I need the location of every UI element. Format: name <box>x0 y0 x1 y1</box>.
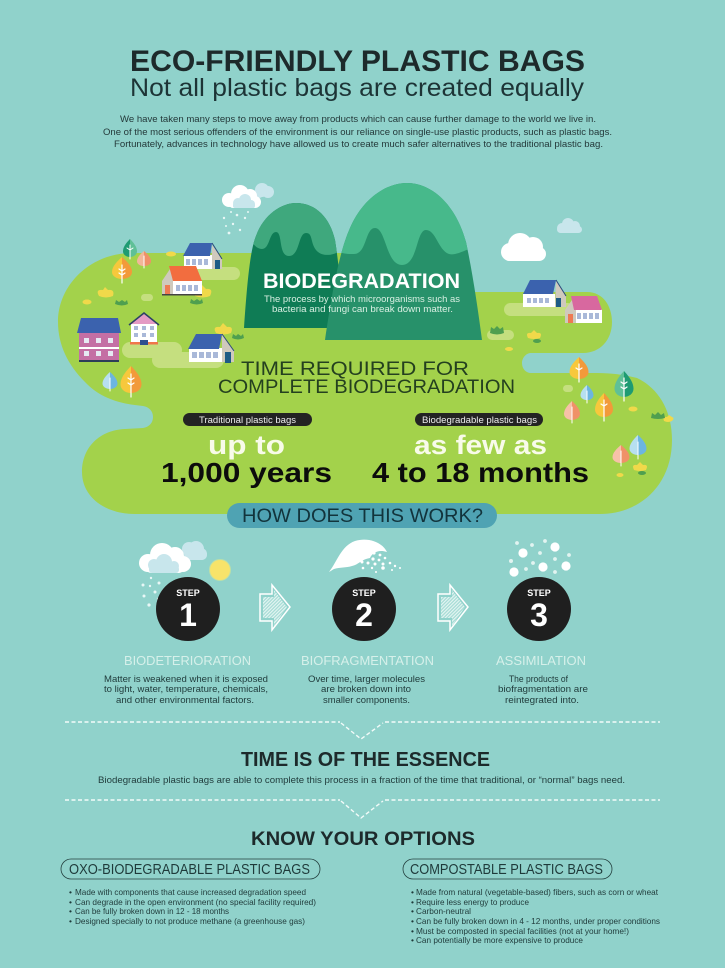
step 2 text <box>301 654 434 705</box>
step 3 text: reintegrated into. <box>505 694 579 705</box>
stat: up to 1,000 years: 1,000 years <box>161 457 332 488</box>
arrow 2 <box>438 585 468 630</box>
step 1 text: and other environmental factors. <box>116 694 254 705</box>
panel: compostable: • <box>411 926 414 936</box>
panel: oxo-biodegradable: • <box>69 897 72 907</box>
step 2 text: smaller components. <box>323 694 410 705</box>
stat: as few as 4 to 18 months: 4 to 18 months <box>372 457 589 488</box>
pill: biodegradable plastic bags: Biodegradable plastic bags <box>422 415 537 425</box>
panel: compostable: • <box>411 897 414 907</box>
pill: traditional plastic bags <box>183 413 312 426</box>
panel: compostable: Must be composted in special facilities (not at your home!) <box>416 926 629 936</box>
heading: time required: TIME REQUIRED FOR <box>241 359 469 380</box>
intro text block <box>103 114 612 149</box>
panel: oxo-biodegradable <box>61 859 320 926</box>
green land shape <box>58 253 672 514</box>
panel: oxo-biodegradable: Made with components that cause increased degradation speed <box>75 887 306 897</box>
step 3 text: biofragmentation are <box>498 683 588 694</box>
subtitle: Not all plastic bags are created equally <box>130 74 585 102</box>
house: blue roof lower <box>188 334 234 363</box>
biodegradation description: The process by which microorganisms such as <box>264 294 460 304</box>
panel: oxo-biodegradable: OXO-BIODEGRADABLE PLASTIC BAGS <box>69 862 310 878</box>
circle: step 1 <box>156 577 220 641</box>
panel: compostable: • <box>411 935 414 945</box>
intro text block: Fortunately, advances in technology have allowed us to create much safer alternatives to the traditional plastic bag. <box>114 139 603 149</box>
step 3 text <box>496 654 588 705</box>
step 3 text: ASSIMILATION <box>496 654 586 668</box>
step 2 text: Over time, larger molecules <box>308 673 425 684</box>
circle: step 3: STEP <box>527 588 551 598</box>
panel: oxo-biodegradable: • <box>69 906 72 916</box>
pale ground patches <box>122 267 574 392</box>
step 1 text <box>104 654 268 705</box>
heading pill: how does this work: HOW DOES THIS WORK? <box>242 505 483 527</box>
step 1 text: Matter is weakened when it is exposed <box>104 673 268 684</box>
stat: up to 1,000 years: up to <box>208 430 285 460</box>
stat: as few as 4 to 18 months <box>372 430 589 488</box>
back mountain <box>244 203 338 328</box>
house: orange roof <box>162 266 202 296</box>
panel: compostable: • <box>411 887 414 897</box>
panel: landscape <box>58 180 674 514</box>
heading: time required: COMPLETE BIODEGRADATION <box>218 377 515 398</box>
step 2 text: BIOFRAGMENTATION <box>301 654 434 668</box>
intro text block: One of the most serious offenders of the environment is our reliance on single-use plastic products, such as plastic bags. <box>103 127 612 137</box>
circle: step 3: 3 <box>530 597 548 633</box>
biodegradation description <box>264 294 460 314</box>
time text: Biodegradable plastic bags are able to complete this process in a fraction of the time that traditional, or “normal” bags need. <box>98 775 625 786</box>
panel: compostable <box>403 859 660 945</box>
shrubs and flowers <box>82 252 674 477</box>
house: right pink roof <box>565 296 602 323</box>
icon: feather (step 2) <box>329 540 401 573</box>
heading: biodegradation: BIODEGRADATION <box>263 270 460 293</box>
circle: step 1: STEP <box>176 588 200 598</box>
icon: weather (step 1) <box>139 541 230 607</box>
circle: step 2: STEP <box>352 588 376 598</box>
panel: oxo-biodegradable: Can be fully broken down in 12 - 18 months <box>75 906 229 916</box>
circle: step 1: 1 <box>179 597 197 633</box>
panel: compostable: COMPOSTABLE PLASTIC BAGS <box>410 862 603 878</box>
step 2 text: are broken down into <box>321 683 411 694</box>
panel: compostable: • <box>411 916 414 926</box>
circle: step 2 <box>332 577 396 641</box>
panel: compostable: • <box>411 906 414 916</box>
panel: oxo-biodegradable: Designed specially to not produce methane (a greenhouse gas) <box>75 916 305 926</box>
panel: compostable: Require less energy to produce <box>416 897 529 907</box>
icon: cloud right white <box>501 233 546 261</box>
panel: oxo-biodegradable: • <box>69 916 72 926</box>
intro text block: We have taken many steps to move away from products which can cause further damage to the world we live in. <box>120 114 596 124</box>
panel: compostable: Carbon-neutral <box>416 906 471 916</box>
house: right blue roof <box>523 280 566 307</box>
panel: compostable: Can potentially be more expensive to produce <box>416 935 583 945</box>
circle: step 3 <box>507 577 571 641</box>
step 3 text: The products of <box>509 673 568 684</box>
panel: compostable: Can be fully broken down in 4 - 12 months, under proper conditions <box>416 916 660 926</box>
icon: cloud right blue <box>557 218 582 233</box>
panel: oxo-biodegradable: Can degrade in the open environment (no special facility required) <box>75 897 316 907</box>
house: blue roof top <box>183 243 222 269</box>
heading: time is of the essence: TIME IS OF THE ESSENCE <box>241 749 490 771</box>
icon: rain cloud <box>222 183 274 234</box>
trees <box>102 239 646 466</box>
step 1 text: BIODETERIORATION <box>124 654 251 668</box>
title: ECO-FRIENDLY PLASTIC BAGS <box>130 45 585 78</box>
step 1 text: to light, water, temperature, chemicals, <box>104 683 268 694</box>
circle: step 2: 2 <box>355 597 373 633</box>
pill: traditional plastic bags: Traditional plastic bags <box>199 415 296 425</box>
house: small pink gable <box>129 313 159 345</box>
house: pink large <box>77 318 121 362</box>
icon: dots (step 3) <box>509 539 571 577</box>
panel: compostable: Made from natural (vegetable-based) fibers, such as corn or wheat <box>416 887 659 897</box>
arrow 1 <box>260 585 290 630</box>
front mountain <box>320 180 490 340</box>
heading: know your options: KNOW YOUR OPTIONS <box>251 829 475 850</box>
stat: up to 1,000 years <box>161 430 332 488</box>
panel: oxo-biodegradable: • <box>69 887 72 897</box>
biodegradation description: bacteria and fungi can break down matter. <box>272 304 453 314</box>
heading: time required <box>218 359 515 398</box>
pill: biodegradable plastic bags <box>415 413 543 426</box>
stat: as few as 4 to 18 months: as few as <box>414 430 547 460</box>
